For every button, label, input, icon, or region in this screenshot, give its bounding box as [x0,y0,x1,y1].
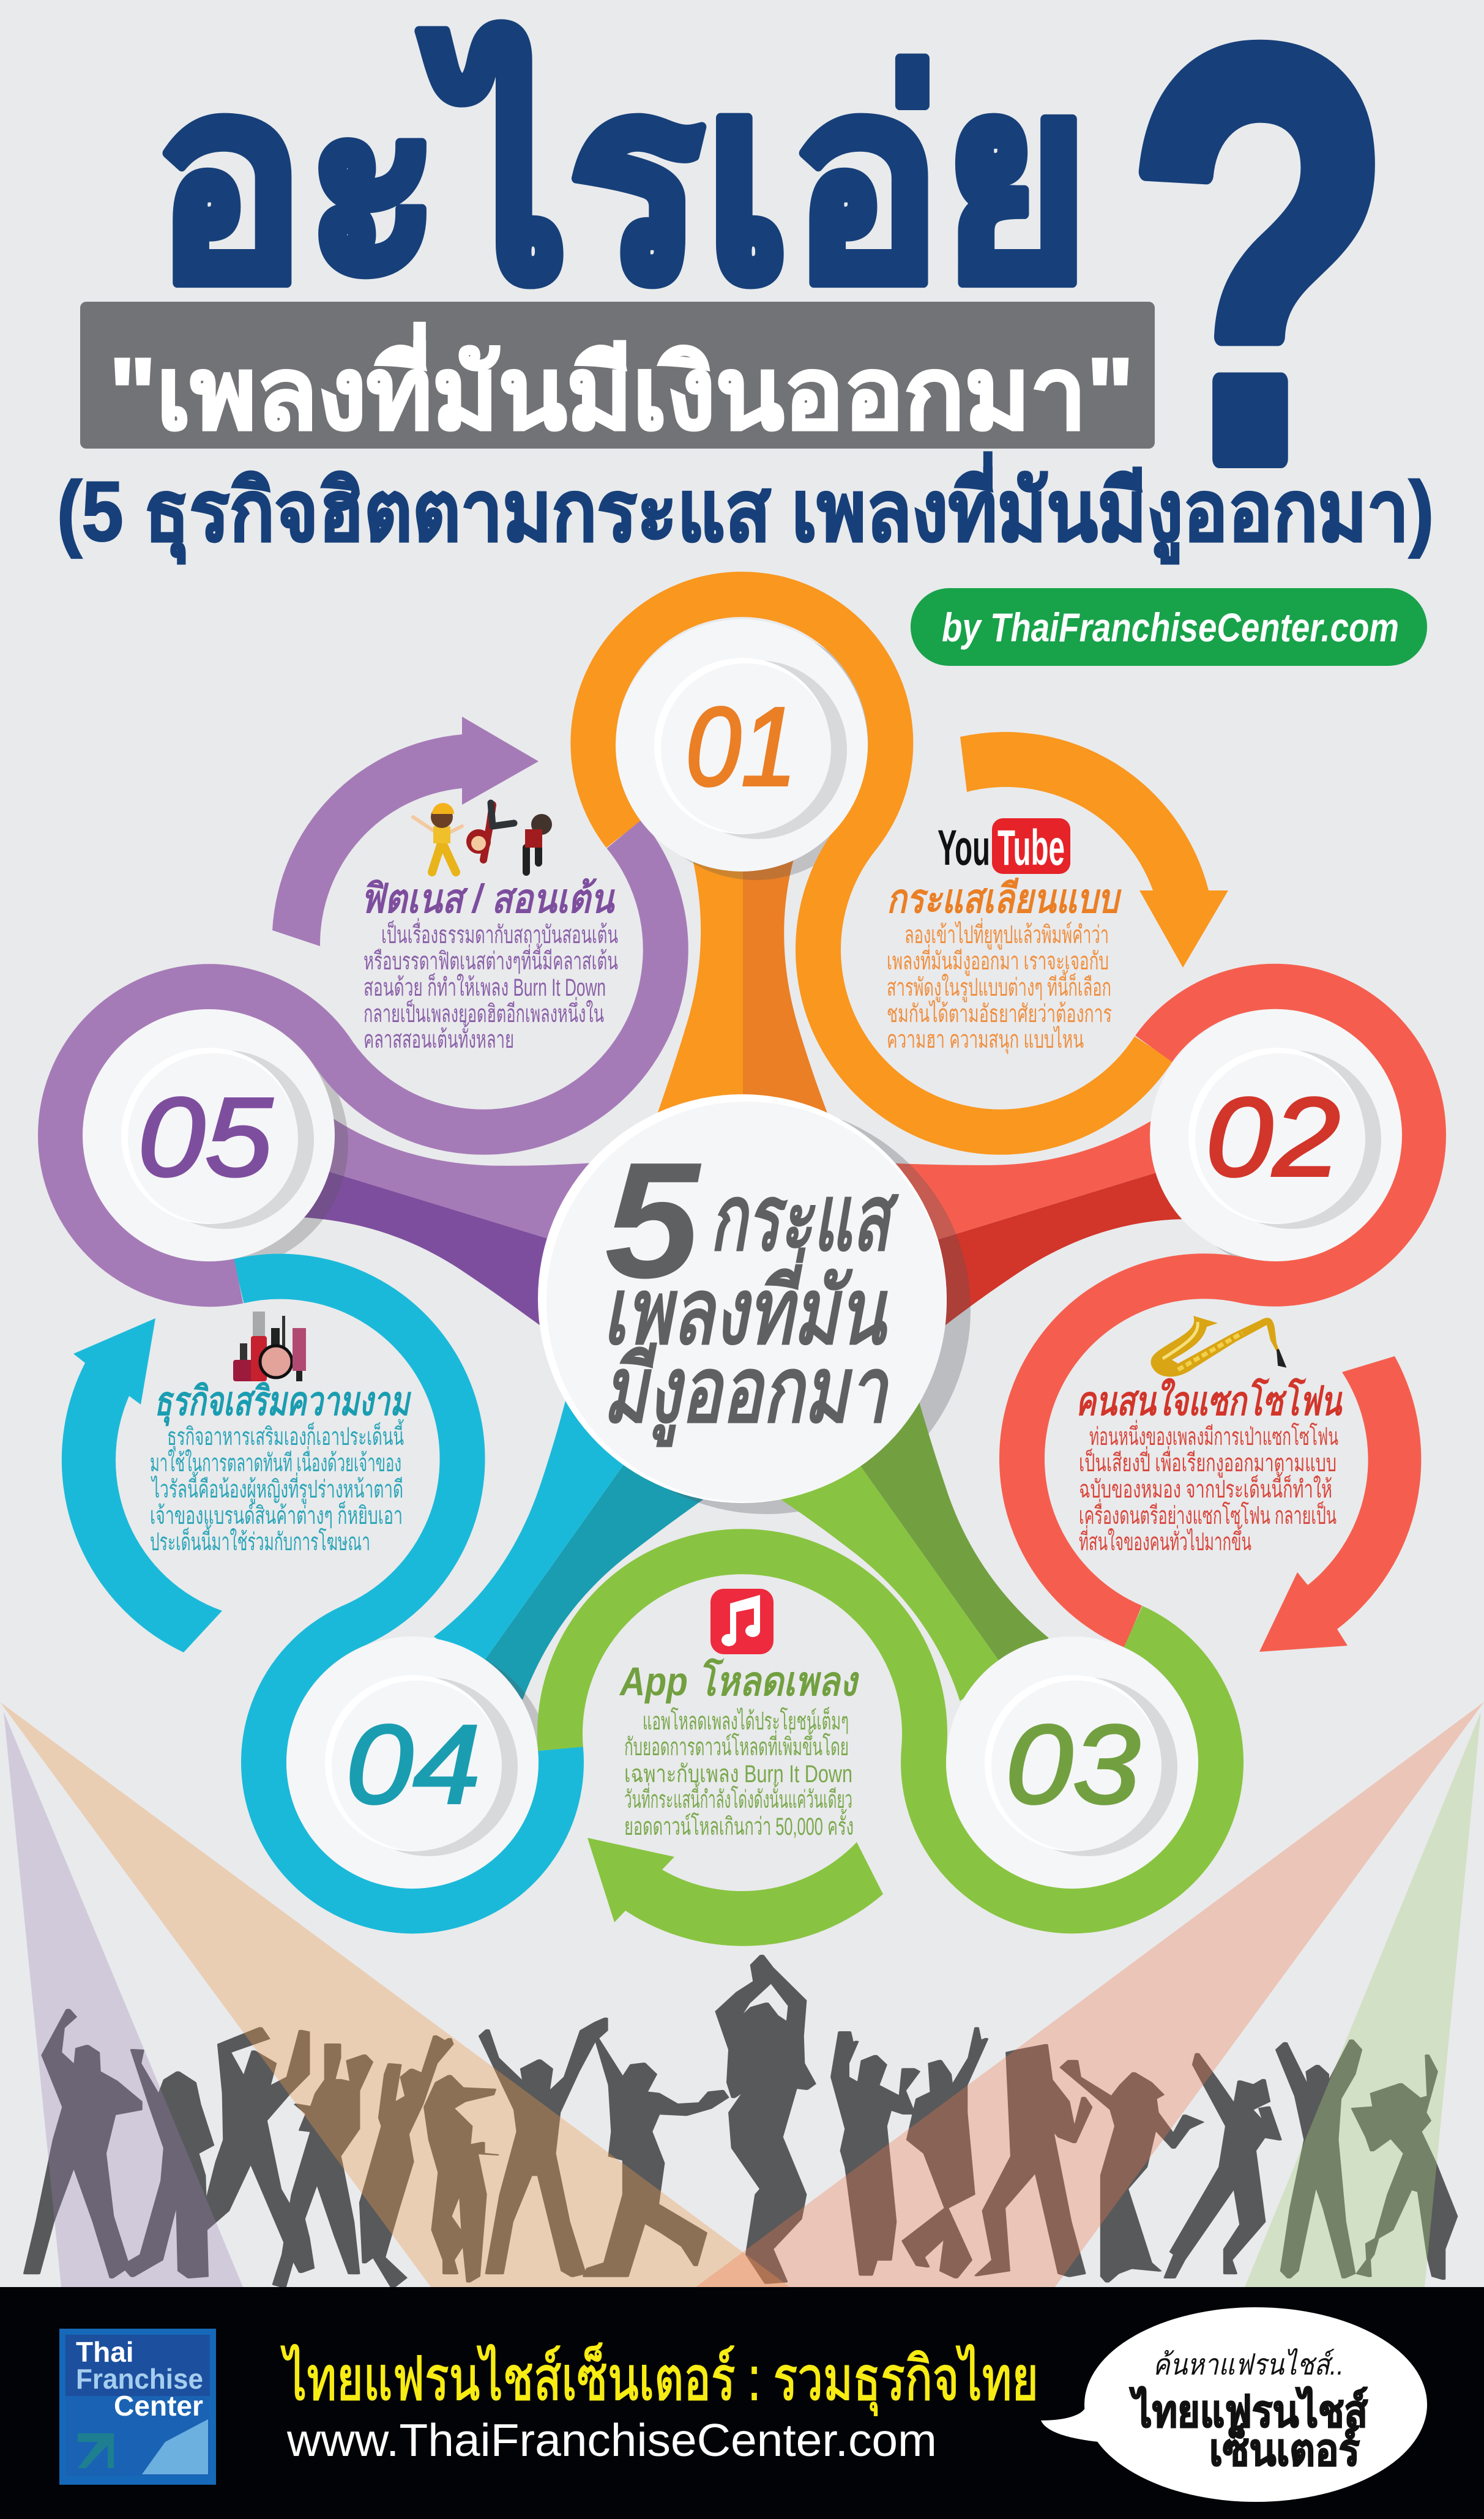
panel: beauty [150,1312,411,1556]
centre heading: มีงูออกมา [603,1338,889,1447]
body text: สารพัดงูในรูปแบบต่างๆ ทีนี้ก็เลือก [887,969,1111,1002]
icon: YouTube logo: You [938,820,990,876]
icon: YouTube logo: Tube [997,820,1065,876]
body text: มาใช้ในการตลาดทันที เนื่องด้วยเจ้าของ [150,1446,401,1477]
body text: เพลงที่มันมีงูออกมา เราจะเจอกับ [887,944,1109,976]
heading: ฟิตเนส / สอนเต้น [360,876,615,921]
body text: ชมกันได้ตามอัธยาศัยว่าต้องการ [887,1000,1112,1028]
heading: ธุรกิจเสริมความงาม [154,1378,411,1427]
footer bar [0,2287,1484,2519]
logo: Thai Franchise Center [59,2329,216,2485]
body text [887,918,1112,1054]
body text: ประเด็นนี้มาใช้ร่วมกับการโฆษณา [150,1524,370,1556]
body text: ที่สนใจของคนทั่วไปมากขึ้น [1079,1524,1251,1556]
heading: คนสนใจแซกโซโฟน [1076,1377,1343,1424]
panel: fitness [360,803,618,1053]
body text: คลาสสอนเต้นทั้งหลาย [364,1021,514,1053]
arrow: purple [272,717,539,946]
body text: กับยอดการดาวน์โหลดที่เพิ่มขึ้นโดย [624,1729,849,1761]
body text: ลองเข้าไปที่ยูทูปแล้วพิมพ์คำว่า [904,918,1109,949]
body text: วันที่กระแสนี้กำลังโด่งดังนั้นแค่วันเดียว [624,1782,852,1813]
ribbon: green loop [560,1551,1221,1911]
panel: saxophone [1076,1316,1343,1556]
disc shadows [96,628,1415,1897]
icon: cosmetics [233,1312,306,1381]
yellow tagline: ไทยแฟรนไชส์เซ็นเตอร์ : รวมธุรกิจไทย [281,2342,1038,2416]
number disc 04 [286,1636,539,1889]
body text: ฉบับของหมอง จากประเด็นนี้ก็ทำให้ [1079,1471,1332,1503]
heading: App โหลดเพลง [619,1657,859,1704]
speech bubble: ค้นหาแฟรนไชส์.. [1153,2348,1344,2381]
body text: ความฮา ความสนุก แบบไหน [887,1026,1084,1054]
number disc 01 [616,619,868,871]
number disc 03: 03 [1005,1701,1140,1827]
spokes to centre [281,845,1204,1723]
logo: Thai Franchise Center: Thai [76,2336,134,2368]
body text: เฉพาะกับเพลง Burn It Down [624,1761,852,1788]
website url: www.ThaiFranchiseCenter.com [286,2414,937,2466]
centre heading: 5 [605,1129,703,1313]
spotlight beams [0,1702,1484,2287]
centre heading: กระแส [710,1166,900,1269]
dancer silhouettes [26,1955,1456,2287]
ribbon: red loop [1022,987,1423,1627]
panel: music app [619,1589,859,1840]
number disc 04: 04 [346,1701,480,1827]
body text: กลายเป็นเพลงยอดฮิตอีกเพลงหนึ่งใน [364,997,604,1028]
number disc 02 [1150,1009,1402,1261]
main title: อะไรเอ่ย [154,22,1090,338]
centre heading: เพลงที่มัน [603,1247,888,1363]
panel: parody trend [887,818,1122,1054]
body text: ธุรกิจอาหารเสริมเองก็เอาประเด็นนี้ [167,1419,404,1452]
body text: ยอดดาวน์โหลเกินกว่า 50,000 ครั้ง [624,1808,854,1840]
centre disc shadow [562,1105,971,1514]
body text: เจ้าของแบรนด์สินค้าต่างๆ ก็หยิบเอา [150,1501,403,1529]
body text: ไวรัลนี้คือน้องผู้หญิงที่รูปร่างหน้าตาดี [151,1471,403,1504]
ribbon: orange loop [593,594,1154,1132]
body text: สอนด้วย ก็ทำให้เพลง Burn It Down [364,972,606,1001]
icon: music app [710,1589,774,1654]
centre heading [603,1129,900,1447]
arrow: red [1259,1356,1421,1652]
number disc 05: 05 [138,1074,273,1200]
body text [624,1706,854,1840]
ribbon: blue loop [239,1277,561,1911]
body text: เป็นเสียงปี่ เพื่อเรียกงูออกมาตามแบบ [1079,1446,1337,1477]
body text [364,918,618,1053]
speech bubble: เซ็นเตอร์ [1209,2424,1360,2475]
number disc 03 [946,1636,1198,1889]
number disc 01: 01 [685,684,797,809]
body text: แอพโหลดเพลงได้ประโยชน์เต็มๆ [643,1706,849,1735]
byline pill: by ThaiFranchiseCenter.com [942,605,1399,650]
body text [150,1419,404,1556]
body text [1079,1420,1338,1556]
logo: Thai Franchise Center: Franchise [76,2363,203,2395]
centre disc [538,1094,947,1503]
grey title band: "เพลงที่มันมีเงินออกมา" [109,323,1134,450]
heading: กระแสเลียนแบบ [887,876,1122,921]
arrow: green [587,1838,883,1946]
ribbon: purple loop [61,834,666,1284]
icon: dancers [413,803,552,872]
arrow: blue [62,1318,222,1652]
icon: YouTube logo [938,818,1070,876]
logo: Thai Franchise Center: Center [114,2390,203,2422]
number disc 05 [83,1009,335,1261]
icon: saxophone [1151,1316,1285,1377]
green spoke [758,1375,1082,1724]
body text: หรือบรรดาฟิตเนสต่างๆที่นี้มีคลาสเต้น [364,943,618,975]
arrow: orange [960,732,1228,968]
number disc 02: 02 [1206,1074,1340,1200]
body text: เครื่องดนตรีอย่างแซกโซโฟน กลายเป็น [1079,1499,1337,1529]
speech bubble [1041,2307,1427,2502]
byline pill [911,588,1427,666]
speech bubble: ไทยแฟรนไชส์ [1129,2386,1368,2436]
body text: เป็นเรื่องธรรมดากับสถาบันสอนเต้น [381,918,618,949]
